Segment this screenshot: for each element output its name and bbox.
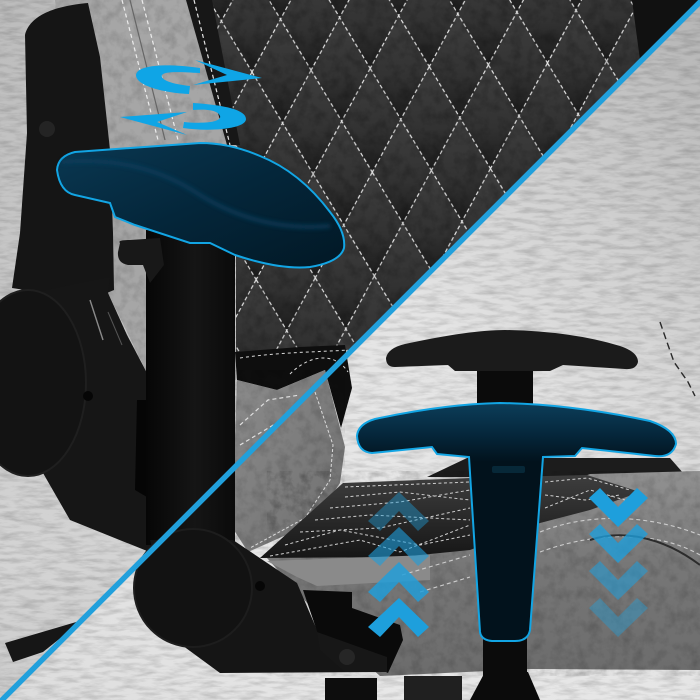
upper side bracket xyxy=(12,3,114,300)
quilted seat dark panel xyxy=(260,475,640,558)
icon: down chevrons xyxy=(589,488,648,637)
lower mechanism plate xyxy=(134,529,403,673)
chair base feet xyxy=(325,672,540,700)
dark seam strip beside band xyxy=(186,0,240,145)
quilted black backrest panel xyxy=(212,0,698,352)
bracket knob xyxy=(39,121,55,137)
recline mechanism plate xyxy=(0,277,157,555)
armrest post xyxy=(146,230,235,545)
armrest lever knob xyxy=(118,238,164,283)
seat mesh backing xyxy=(427,458,684,478)
icon: up chevrons xyxy=(368,492,429,637)
lever handle xyxy=(5,620,83,662)
grey strip below quilt xyxy=(267,555,430,586)
recline disc xyxy=(0,290,86,476)
black T armrest raised xyxy=(386,330,638,410)
lower post xyxy=(483,635,527,677)
side bolster cushion xyxy=(232,370,345,552)
lower disc xyxy=(134,529,252,647)
seat cushion xyxy=(260,471,700,676)
icon: swivel rotation arrows xyxy=(120,60,262,135)
lower backrest dark cushion xyxy=(235,345,352,428)
blue highlighted T armrest lowered xyxy=(357,403,676,641)
grey suede backrest side band xyxy=(55,0,236,380)
blue highlighted swivel armrest xyxy=(57,143,344,268)
